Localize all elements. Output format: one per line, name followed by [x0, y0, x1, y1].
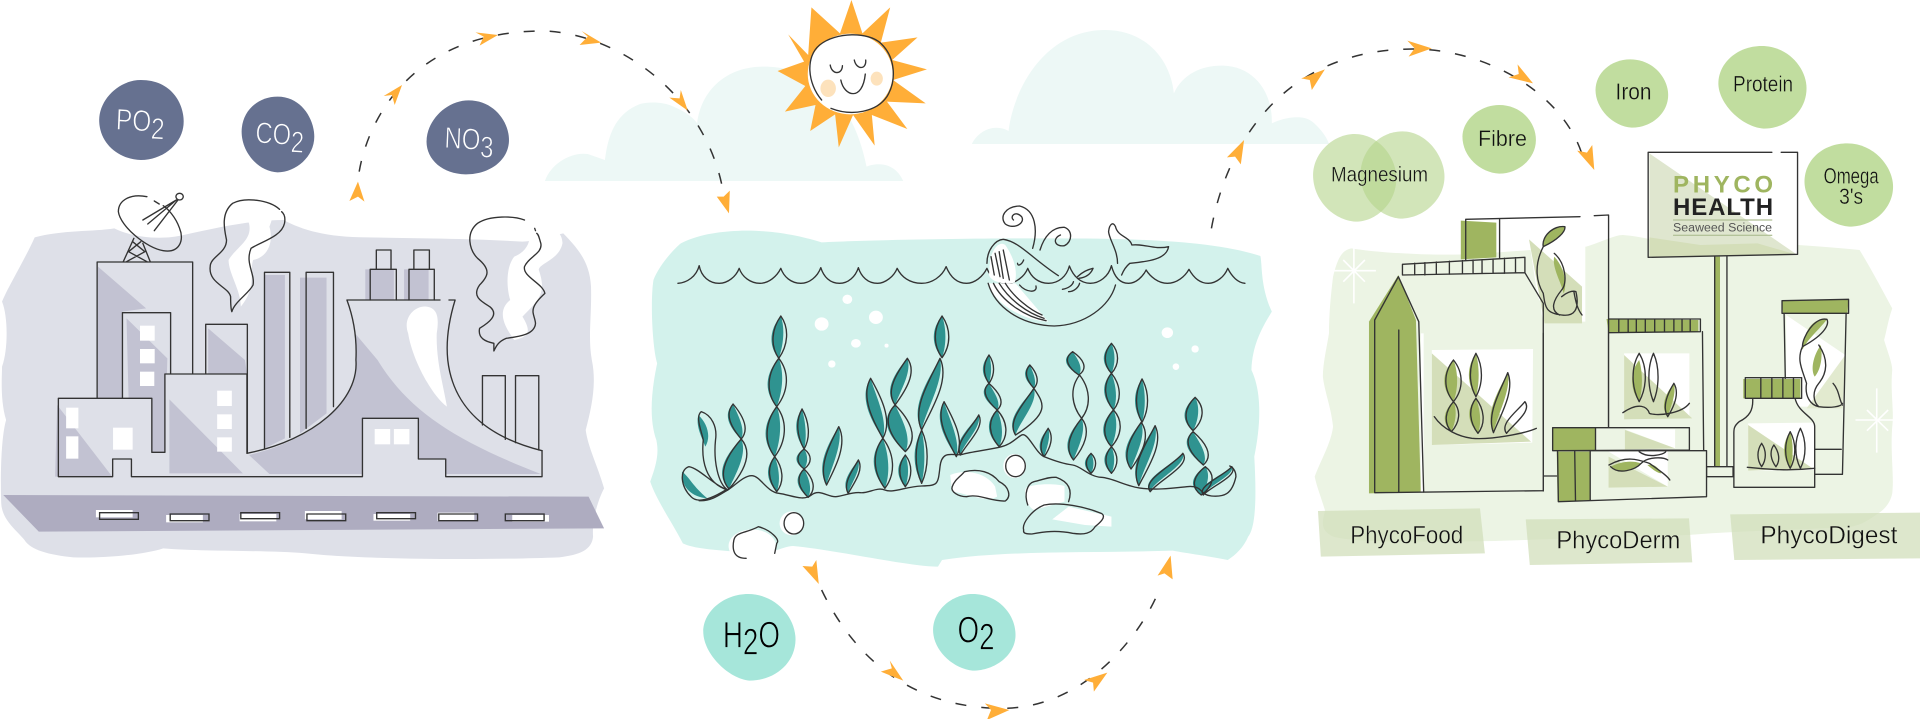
sign: Phyco Health logo: [1648, 152, 1798, 257]
sign: Phyco Health logo: HEALTH: [1673, 194, 1773, 221]
icon: boxed product: [1553, 428, 1707, 502]
icon: whale: [987, 206, 1169, 326]
cloud right: [972, 30, 1329, 144]
label: PhycoDigest: PhycoDigest: [1760, 521, 1897, 549]
products background: [1315, 235, 1893, 542]
bubble: Protein: [1718, 46, 1807, 129]
icon: sun: [778, 0, 927, 147]
bubble: Omega 3's: 3's: [1839, 184, 1863, 209]
arrow: city to ocean: [349, 31, 730, 213]
bubble: Magnesium: Magnesium: [1331, 164, 1428, 187]
smoke left: [210, 200, 285, 312]
cloud left: [545, 67, 903, 181]
panel: products: [1313, 46, 1920, 565]
bubble: H2O: 2: [743, 620, 758, 662]
panel: ocean: [650, 206, 1272, 567]
arrow: ocean to products: [1211, 41, 1594, 228]
bubble: H2O: O: [758, 613, 780, 655]
bubble: NO3: 3: [479, 129, 494, 165]
bubble: Fibre: [1462, 105, 1536, 174]
arrow: ocean loop below: [802, 556, 1173, 719]
tall building: [97, 262, 206, 452]
bubble: Protein: Protein: [1733, 72, 1793, 97]
sign: Phyco Health logo: Seaweed Science: [1673, 223, 1772, 235]
icon: middle package: [1607, 319, 1704, 453]
bubble: Omega 3's: [1804, 143, 1893, 227]
bubble: Magnesium: [1313, 131, 1444, 222]
bubble: H2O: [703, 594, 796, 681]
icon: tube: [1782, 299, 1849, 474]
city background: [1, 220, 604, 559]
low buildings: [55, 374, 542, 477]
bubble: Fibre: Fibre: [1478, 126, 1527, 151]
label: PhycoDigest: [1730, 513, 1920, 560]
bubble: H2O: H: [723, 613, 743, 655]
road: [3, 495, 604, 532]
bubble: O2: O: [958, 609, 979, 651]
sparkles: [1332, 238, 1900, 453]
label: PhycoDerm: PhycoDerm: [1556, 526, 1680, 554]
bubble: CO2: [242, 97, 314, 172]
bubble: CO2: 2: [290, 125, 305, 160]
smokestacks: [264, 272, 333, 448]
label: PhycoFood: [1318, 508, 1485, 557]
sign post: [1707, 257, 1733, 477]
ocean background: [650, 231, 1272, 567]
bubbles: [815, 295, 1199, 370]
bubble: NO3: NO: [444, 120, 481, 157]
icon: milk carton: [1369, 257, 1543, 493]
bubble: NO3: [427, 100, 509, 174]
panel: industrial city: [1, 193, 604, 559]
bubble: Iron: [1596, 59, 1668, 128]
bubble: CO2: CO: [255, 116, 292, 152]
bubble: PO2: [99, 80, 184, 160]
bubble: Omega 3's: Omega: [1824, 163, 1879, 188]
bubbles: nutrients: [1313, 46, 1893, 227]
icon: jar: [1734, 378, 1815, 487]
cooling tower: [247, 250, 542, 477]
back box: [1461, 215, 1609, 491]
rocks: [729, 454, 1111, 563]
bubble: O2: [933, 594, 1016, 671]
bubble: O2: 2: [979, 616, 995, 658]
bubble: PO2: 2: [150, 111, 165, 146]
label: PhycoDerm: [1526, 518, 1692, 565]
right towers: [482, 376, 539, 450]
sign: Phyco Health logo: PHYCO: [1673, 172, 1773, 199]
smoke right: [470, 210, 562, 351]
waves: [678, 266, 1245, 283]
label: PhycoFood: PhycoFood: [1350, 521, 1463, 549]
seaweed: [682, 316, 1236, 501]
short building: [206, 324, 247, 453]
bubble: Iron: Iron: [1616, 78, 1652, 104]
icon: satellite dish: [118, 193, 183, 262]
clouds: [545, 30, 1329, 181]
bubble: PO2: PO: [115, 102, 152, 138]
